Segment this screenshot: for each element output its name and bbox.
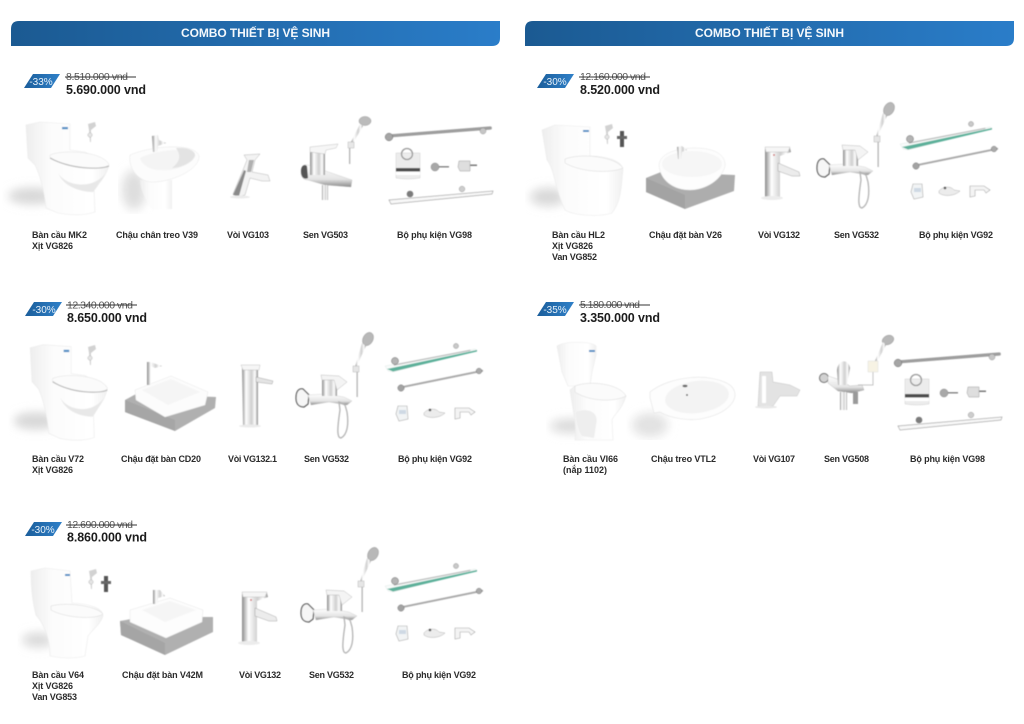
labels: combo 5: (nắp 1102) — [563, 464, 607, 475]
labels: combo 2: Chậu đặt bàn CD20 — [121, 454, 201, 464]
product: vessel basin V42M on slab — [120, 590, 213, 655]
combo 5 — [537, 299, 1002, 475]
product: toilet VI66 — [550, 342, 626, 440]
price block: combo 3 — [25, 519, 147, 544]
labels: combo 3: Vòi VG132 — [239, 670, 281, 680]
labels: combo 2: Sen VG532 — [304, 454, 349, 464]
price block: combo 2 — [25, 300, 147, 325]
price block: combo 1 — [24, 71, 146, 97]
labels: combo 4: Xịt VG826 — [552, 241, 593, 251]
labels: combo 3: Bàn cầu V64 — [32, 670, 84, 680]
price block: combo 3: 12.690.000 vnd — [67, 519, 133, 531]
panel: left column — [8, 21, 500, 702]
price block: combo 3: 8.860.000 vnd — [67, 530, 147, 544]
product: accessory set VG92 — [385, 564, 483, 641]
product: accessory set VG98 — [385, 126, 493, 204]
labels: combo 1: Chậu chân treo V39 — [116, 230, 198, 240]
labels: combo 4: Chậu đặt bàn V26 — [649, 230, 722, 240]
product: toilet HL2 with sprayer and valve — [530, 124, 627, 215]
price block: combo 5: 3.350.000 vnd — [580, 311, 660, 325]
labels: combo 4: Bàn cầu HL2 — [552, 230, 605, 240]
combo 2 — [13, 300, 483, 475]
product: toilet V64 with sprayer and valve — [22, 568, 111, 658]
price block: combo 2: -30% — [32, 305, 56, 316]
labels: combo 4: Sen VG532 — [834, 230, 879, 240]
panel: right column — [525, 21, 1014, 475]
price block: combo 1: -33% — [29, 77, 53, 88]
labels: combo 5: Bộ phụ kiện VG98 — [910, 454, 985, 464]
labels: combo 2: Vòi VG132.1 — [228, 454, 277, 464]
heading banner: left — [11, 21, 500, 46]
price block: combo 5 — [537, 299, 660, 325]
labels: combo 2: Bàn cầu V72 — [32, 454, 84, 464]
labels: combo 4 — [552, 230, 993, 262]
product: accessory set VG92 — [385, 344, 483, 421]
price block: combo 4: 8.520.000 vnd — [580, 83, 660, 97]
labels: combo 5: Chậu treo VTL2 — [651, 454, 716, 464]
labels: combo 3: Bộ phụ kiện VG92 — [402, 670, 476, 680]
product: vessel basin CD20 on slab — [125, 362, 216, 431]
heading banner: left: COMBO THIẾT BỊ VỆ SINH — [181, 25, 330, 40]
product: vessel basin V26 on slab — [646, 146, 735, 209]
heading banner: right: COMBO THIẾT BỊ VỆ SINH — [695, 25, 844, 40]
product: toilet V72 with sprayer — [13, 345, 107, 440]
labels: combo 3 — [32, 670, 476, 702]
heading banner: right — [525, 21, 1014, 46]
price block: combo 1: 5.690.000 vnd — [66, 83, 146, 97]
labels: combo 3: Van VG853 — [32, 692, 77, 702]
product: shower VG508 — [820, 333, 895, 410]
labels: combo 5 — [563, 454, 985, 475]
labels: combo 3: Sen VG532 — [309, 670, 354, 680]
product: wall basin V39 — [122, 135, 199, 210]
labels: combo 2: Xịt VG826 — [32, 465, 73, 475]
price block: combo 2: 8.650.000 vnd — [67, 311, 147, 325]
labels: combo 4: Van VG852 — [552, 252, 597, 262]
price block: combo 2: 12.340.000 vnd — [67, 300, 133, 312]
combo 1 — [8, 71, 493, 251]
labels: combo 2: Bộ phụ kiện VG92 — [398, 454, 472, 464]
product: faucet VG132 — [238, 592, 277, 645]
combo 3 — [22, 519, 483, 702]
labels: combo 1: Bộ phụ kiện VG98 — [397, 230, 472, 240]
product: wall basin VTL2 — [632, 377, 735, 437]
product: toilet MK2 with sprayer — [8, 122, 109, 215]
price block: combo 4: -30% — [543, 77, 567, 88]
labels: combo 4: Bộ phụ kiện VG92 — [919, 230, 993, 240]
product: shower VG532 — [817, 100, 897, 208]
price block: combo 4 — [537, 71, 660, 97]
product: faucet VG103 — [230, 154, 270, 198]
product: tall faucet VG132.1 — [239, 365, 273, 428]
product: shower VG503 — [301, 116, 371, 200]
combo 4 — [530, 71, 998, 262]
labels: combo 5: Bàn cầu VI66 — [563, 454, 618, 464]
price block: combo 5: 5.180.000 vnd — [580, 299, 640, 311]
labels: combo 1: Xịt VG826 — [32, 241, 73, 251]
price block: combo 4: 12.160.000 vnd — [580, 71, 646, 83]
price block: combo 5: -35% — [543, 305, 567, 316]
labels: combo 1: Vòi VG103 — [227, 230, 269, 240]
labels: combo 4: Vòi VG132 — [758, 230, 800, 240]
labels: combo 3: Chậu đặt bàn V42M — [122, 670, 203, 680]
product: accessory set VG98 — [894, 352, 1002, 430]
price block: combo 3: -30% — [31, 525, 55, 536]
product: faucet VG107 — [755, 372, 800, 408]
labels: combo 3: Xịt VG826 — [32, 681, 73, 691]
price block: combo 1: 8.510.000 vnd — [66, 71, 128, 83]
product: accessory set VG92 — [900, 122, 998, 199]
product: shower VG532 — [301, 545, 381, 653]
labels: combo 1: Bàn cầu MK2 — [32, 230, 87, 240]
labels: combo 5: Sen VG508 — [824, 454, 869, 464]
labels: combo 5: Vòi VG107 — [753, 454, 795, 464]
labels: combo 1: Sen VG503 — [303, 230, 348, 240]
labels: combo 1 — [32, 230, 472, 251]
labels: combo 2 — [32, 454, 472, 475]
product: faucet VG132 — [761, 147, 800, 200]
product: shower VG532 — [296, 330, 376, 438]
